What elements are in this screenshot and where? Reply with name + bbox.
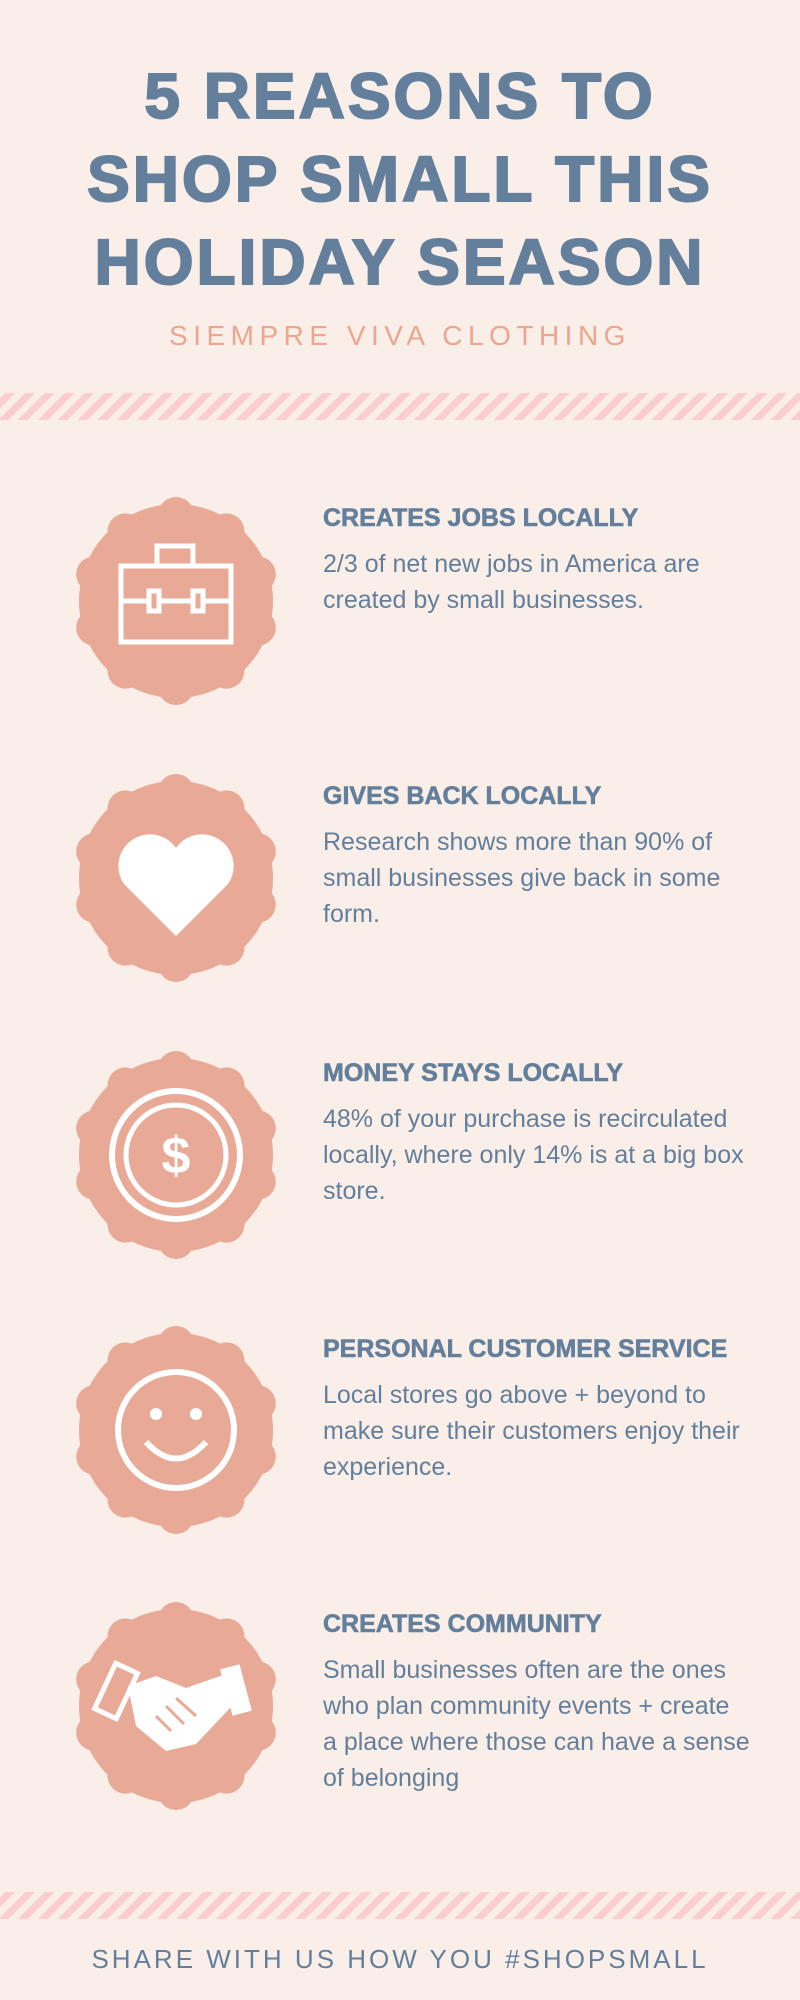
item 5 text: who plan community events + create bbox=[323, 1692, 729, 1720]
icon: smiley bbox=[76, 1326, 276, 1534]
title: 5 REASONS TO bbox=[144, 60, 656, 132]
item 1 text bbox=[323, 504, 700, 614]
item 4 text: make sure their customers enjoy their bbox=[323, 1417, 740, 1445]
bottom stripe band bbox=[0, 1892, 800, 1919]
title: SHOP SMALL THIS bbox=[87, 143, 713, 215]
item 3 text: MONEY STAYS LOCALLY bbox=[323, 1059, 623, 1087]
item 5 text: a place where those can have a sense bbox=[323, 1728, 750, 1756]
title: HOLIDAY SEASON bbox=[94, 226, 706, 298]
icon: briefcase bbox=[76, 497, 276, 705]
item 1 text: created by small businesses. bbox=[323, 586, 644, 614]
item 4 text: Local stores go above + beyond to bbox=[323, 1381, 706, 1409]
title bbox=[87, 60, 713, 298]
top stripe band bbox=[0, 393, 800, 420]
item 5 text: CREATES COMMUNITY bbox=[323, 1610, 602, 1638]
item 5 text bbox=[323, 1610, 750, 1792]
icon: dollar coin bbox=[76, 1051, 276, 1259]
item 3 text: 48% of your purchase is recirculated bbox=[323, 1105, 727, 1133]
icon: handshake bbox=[76, 1602, 276, 1810]
item 2 text: form. bbox=[323, 900, 380, 928]
item 1 text: CREATES JOBS LOCALLY bbox=[323, 504, 638, 532]
item 4 text: experience. bbox=[323, 1453, 452, 1481]
icon: heart bbox=[76, 774, 276, 982]
item 3 text bbox=[323, 1059, 744, 1205]
item 4 text bbox=[323, 1335, 740, 1481]
item 5 text: of belonging bbox=[323, 1764, 459, 1792]
icon: dollar coin: $ bbox=[162, 1127, 191, 1185]
item 2 text: Research shows more than 90% of bbox=[323, 828, 712, 856]
item 1 text: 2/3 of net new jobs in America are bbox=[323, 550, 700, 578]
item 2 text bbox=[323, 782, 720, 928]
subtitle: SIEMPRE VIVA CLOTHING bbox=[169, 320, 631, 351]
item 5 text: Small businesses often are the ones bbox=[323, 1656, 726, 1684]
item 2 text: small businesses give back in some bbox=[323, 864, 720, 892]
item 4 text: PERSONAL CUSTOMER SERVICE bbox=[323, 1335, 727, 1363]
footer: SHARE WITH US HOW YOU #SHOPSMALL bbox=[91, 1944, 709, 1974]
item 2 text: GIVES BACK LOCALLY bbox=[323, 782, 601, 810]
item 3 text: store. bbox=[323, 1177, 386, 1205]
item 3 text: locally, where only 14% is at a big box bbox=[323, 1141, 744, 1169]
